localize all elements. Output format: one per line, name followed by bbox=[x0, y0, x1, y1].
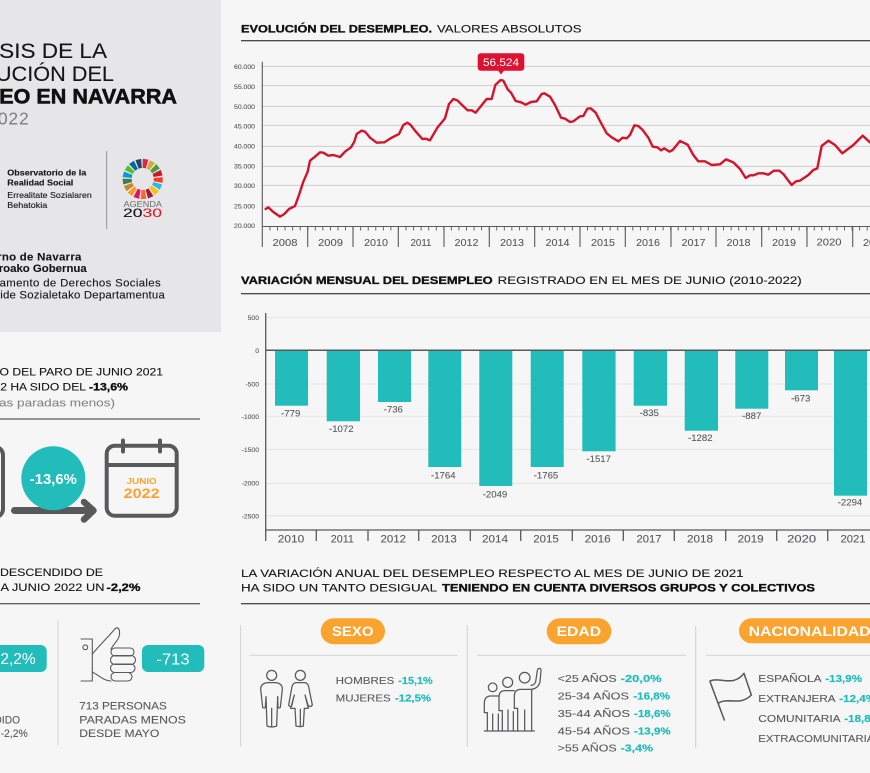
y axis labels: 60.000 bbox=[234, 65, 256, 71]
x axis years: 2014 bbox=[546, 237, 570, 249]
panel: nacionalidad bbox=[696, 618, 870, 748]
icon: Agenda 2030 wheel: 20 bbox=[123, 208, 142, 220]
logo: Observatorio de la Realidad Social: Realidad Social bbox=[7, 178, 73, 188]
y axis labels: 30.000 bbox=[234, 184, 256, 190]
y axis labels: 0 bbox=[255, 348, 259, 355]
x axis years: 2011 bbox=[410, 237, 432, 249]
value labels: -736 bbox=[384, 404, 403, 415]
value labels: -1517 bbox=[586, 454, 611, 465]
text: 713 personas paradas menos bbox=[79, 700, 186, 740]
value labels: -887 bbox=[742, 411, 761, 422]
panel: edad bbox=[467, 618, 686, 755]
icon: calendar junio 2022: JUNIO bbox=[127, 477, 157, 486]
x axis years: 2021 bbox=[840, 534, 866, 546]
pill: nacionalidad: NACIONALIDAD bbox=[749, 623, 870, 639]
icon: thumbs up bbox=[81, 628, 136, 681]
text: grupos de edad: 35-44 AÑOS bbox=[558, 707, 630, 720]
logo: Observatorio de la Realidad Social: Errealitate Sozialaren bbox=[7, 190, 92, 200]
y axis labels: 40.000 bbox=[234, 144, 256, 150]
text: grupos de edad: -3,4% bbox=[621, 743, 654, 755]
arrow bbox=[14, 502, 94, 520]
x axis years: 2018 bbox=[687, 534, 713, 546]
text: hombres y mujeres: -12,5% bbox=[395, 692, 432, 704]
icon: Agenda 2030 wheel: AGENDA bbox=[124, 200, 163, 209]
text: grupos de edad: -16,8% bbox=[633, 690, 671, 702]
text: grupos de edad: 45-54 AÑOS bbox=[558, 724, 630, 737]
icon: hombre y mujer bbox=[261, 670, 312, 727]
icon: calendar junio 2022: 2022 bbox=[124, 485, 160, 501]
pill: edad bbox=[547, 618, 611, 644]
x axis years: 2013 bbox=[500, 237, 524, 249]
x axis years: 2017 bbox=[636, 534, 662, 546]
x axis years: 2015 bbox=[533, 534, 559, 546]
x axis years: 2008 bbox=[272, 237, 298, 249]
text: grupos de edad: 25-34 AÑOS bbox=[558, 689, 629, 702]
text: nacionalidades: -13,9% bbox=[825, 673, 863, 685]
icon: calendar junio 2021 (cropped) bbox=[0, 447, 3, 517]
text: grupos de edad: -20,0% bbox=[621, 673, 663, 685]
badge: -713 bbox=[142, 645, 204, 672]
y axis labels bbox=[234, 65, 256, 230]
x axis years: 2010 bbox=[364, 237, 388, 249]
y axis labels: 50.000 bbox=[234, 105, 256, 111]
y axis labels: -500 bbox=[245, 382, 259, 388]
x axis years: 2020 bbox=[787, 534, 816, 546]
value labels: -835 bbox=[640, 408, 659, 419]
panel: sexo bbox=[241, 618, 458, 747]
y axis labels: 20.000 bbox=[234, 224, 256, 230]
bars bbox=[275, 350, 867, 496]
heading: descenso mensual: -2,2% bbox=[106, 582, 141, 594]
text: hombres y mujeres bbox=[336, 675, 433, 704]
icon: bandera bbox=[710, 673, 751, 720]
text: nacionalidades: EXTRACOMUNITARIA bbox=[758, 733, 870, 745]
data line bbox=[266, 80, 870, 217]
text: descendido -2,2% bbox=[0, 714, 28, 740]
value labels: -2049 bbox=[483, 489, 507, 500]
text: 713 personas paradas menos: DESDE MAYO bbox=[79, 728, 160, 740]
heading: descenso mensual: DESCENDIDO DE bbox=[0, 567, 103, 579]
bar chart: variación mensual bbox=[242, 313, 870, 546]
pill: sexo: SEXO bbox=[332, 623, 374, 639]
text: nacionalidades bbox=[758, 672, 870, 745]
y axis labels: 500 bbox=[248, 315, 259, 322]
x axis years: 2009 bbox=[318, 237, 343, 249]
heading: variación anual: HA SIDO UN TANTO DESIGUAL bbox=[241, 583, 437, 595]
heading: variación mensual bbox=[241, 274, 802, 287]
callout: máximo 56.524: 56.524 bbox=[483, 57, 519, 69]
text: grupos de edad: -18,6% bbox=[634, 708, 671, 720]
heading: evolución del desempleo: VALORES ABSOLUTOS bbox=[437, 23, 582, 35]
text: hombres y mujeres: MUJERES bbox=[336, 692, 391, 704]
value labels: -1764 bbox=[431, 471, 456, 482]
x axis years: 2013 bbox=[431, 534, 457, 546]
badge: -13,6% bbox=[21, 446, 85, 510]
value labels: -1072 bbox=[329, 424, 354, 435]
icon: Agenda 2030 wheel: 30 bbox=[142, 208, 162, 220]
x axis years: 2019 bbox=[772, 237, 796, 249]
badge: -2,2% bbox=[0, 645, 47, 672]
x axis years bbox=[278, 534, 866, 546]
y axis labels: -2500 bbox=[242, 514, 259, 520]
x axis years: 2016 bbox=[636, 237, 660, 249]
text: hombres y mujeres: HOMBRES bbox=[336, 675, 394, 687]
heading: descenso interanual: -13,6% bbox=[89, 382, 128, 394]
value labels: -779 bbox=[281, 409, 300, 420]
text: grupos de edad: -13,9% bbox=[634, 725, 671, 737]
text: 713 personas paradas menos: PARADAS MENOS bbox=[79, 714, 186, 726]
pill: sexo bbox=[321, 618, 385, 644]
x axis years: 2012 bbox=[454, 237, 479, 249]
x axis years: 2017 bbox=[682, 237, 706, 249]
y axis labels: -1000 bbox=[242, 414, 259, 421]
heading: descenso mensual bbox=[0, 567, 141, 594]
text: grupos de edad bbox=[558, 672, 671, 755]
value labels: -2294 bbox=[838, 497, 863, 508]
value labels: -1282 bbox=[688, 433, 713, 444]
logo: Observatorio de la Realidad Social: Observatorio de la bbox=[7, 168, 87, 178]
text: 713 personas paradas menos: 713 PERSONAS bbox=[79, 700, 167, 712]
badge: -13,6%: -13,6% bbox=[30, 471, 77, 488]
x axis years: 2014 bbox=[482, 534, 508, 546]
text: nacionalidades: ESPAÑOLA bbox=[758, 672, 822, 685]
heading: variación anual: TENIENDO EN CUENTA DIVERSOS GRUPOS Y COLECTIVOS bbox=[442, 583, 815, 595]
title bbox=[0, 40, 177, 109]
text: nacionalidades: COMUNITARIA bbox=[758, 713, 841, 725]
badge: -713: -713 bbox=[156, 651, 190, 668]
text: grupos de edad: <25 AÑOS bbox=[558, 672, 617, 685]
x axis years: 2018 bbox=[726, 237, 751, 249]
y axis labels: -1500 bbox=[242, 447, 259, 454]
x axis years: 2016 bbox=[585, 534, 611, 546]
logo: Observatorio de la Realidad Social bbox=[7, 168, 92, 210]
heading: variación mensual: REGISTRADO EN EL MES DE JUNIO (2010-2022) bbox=[498, 275, 802, 287]
x axis years: 2019 bbox=[738, 534, 764, 546]
x axis years: 2012 bbox=[381, 534, 406, 546]
pill: edad: EDAD bbox=[557, 623, 601, 639]
value labels: -673 bbox=[791, 394, 810, 405]
heading: variación anual: LA VARIACIÓN ANUAL DEL DESEMPLEO RESPECTO AL MES DE JUNIO DE 2021 bbox=[241, 567, 744, 580]
text: grupos de edad: >55 AÑOS bbox=[558, 742, 617, 755]
y axis labels: 25.000 bbox=[234, 204, 256, 210]
heading: descenso mensual: A JUNIO 2022 UN bbox=[0, 582, 105, 594]
heading: variación mensual: VARIACIÓN MENSUAL DEL DESEMPLEO bbox=[241, 274, 493, 287]
icon: calendar junio 2022 bbox=[107, 440, 177, 516]
panel: header bbox=[0, 0, 221, 332]
heading: evolución del desempleo bbox=[241, 22, 582, 35]
text: hombres y mujeres: -15,1% bbox=[398, 675, 433, 687]
x axis years: 2011 bbox=[331, 534, 354, 546]
y axis labels: 45.000 bbox=[234, 124, 256, 130]
icon: grupo de personas bbox=[484, 668, 541, 731]
logo: Gobierno de Navarra bbox=[0, 252, 165, 302]
heading: descenso interanual bbox=[0, 367, 163, 410]
y axis labels bbox=[242, 315, 259, 520]
x axis years: 2020 bbox=[816, 236, 842, 248]
y axis labels: 55.000 bbox=[234, 85, 256, 91]
pill: nacionalidad bbox=[739, 618, 870, 643]
logo: Observatorio de la Realidad Social: Behatokia bbox=[7, 200, 48, 210]
heading: evolución del desempleo: EVOLUCIÓN DEL DESEMPLEO. bbox=[241, 22, 432, 35]
icon: Agenda 2030 wheel bbox=[122, 159, 163, 220]
line chart: evolución del desempleo bbox=[234, 53, 870, 249]
y axis labels: 35.000 bbox=[234, 164, 256, 170]
x axis years: 2010 bbox=[278, 534, 304, 546]
value labels bbox=[281, 394, 863, 508]
value labels: -1765 bbox=[534, 471, 558, 482]
x axis years bbox=[272, 236, 870, 249]
x axis years: 2015 bbox=[591, 237, 615, 249]
heading: variación anual bbox=[241, 567, 815, 595]
y axis labels: -2000 bbox=[242, 480, 259, 488]
text: nacionalidades: EXTRANJERA bbox=[758, 693, 836, 705]
callout: máximo 56.524 bbox=[478, 53, 524, 74]
